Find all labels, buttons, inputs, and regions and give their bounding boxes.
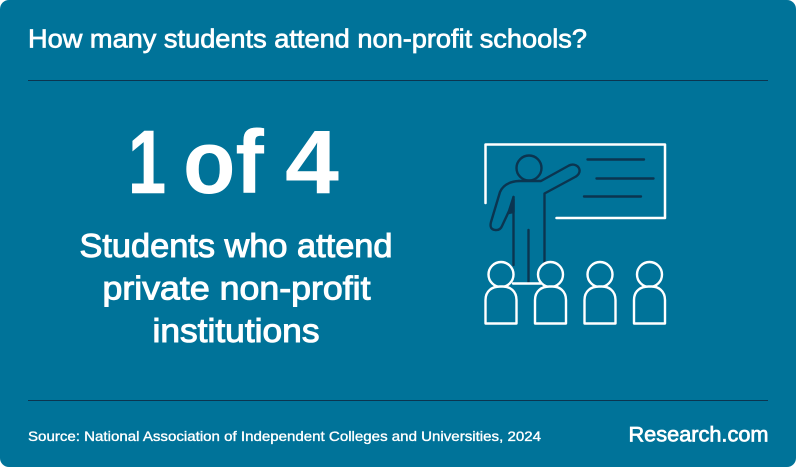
icon: board text lines — [584, 160, 654, 196]
title: How many students attend non-profit schools? — [28, 24, 587, 54]
icon: teacher — [491, 156, 580, 282]
logo: Research.com: Research.com — [628, 424, 768, 446]
statistic description: Students who attend — [80, 227, 392, 264]
source note: Source: National Association of Independent Colleges and Universities, 2024 — [28, 428, 541, 444]
statistic description: institutions — [152, 312, 320, 349]
big statistic: 4 — [285, 113, 339, 213]
icon: students — [486, 262, 665, 324]
icon: blackboard — [486, 144, 665, 218]
big statistic: of — [183, 113, 265, 213]
icon: teacher and students at a board — [486, 144, 665, 324]
statistic description — [80, 227, 392, 349]
big statistic — [128, 113, 339, 213]
big statistic: 1 — [128, 113, 166, 213]
statistic description: private non-profit — [102, 270, 370, 306]
